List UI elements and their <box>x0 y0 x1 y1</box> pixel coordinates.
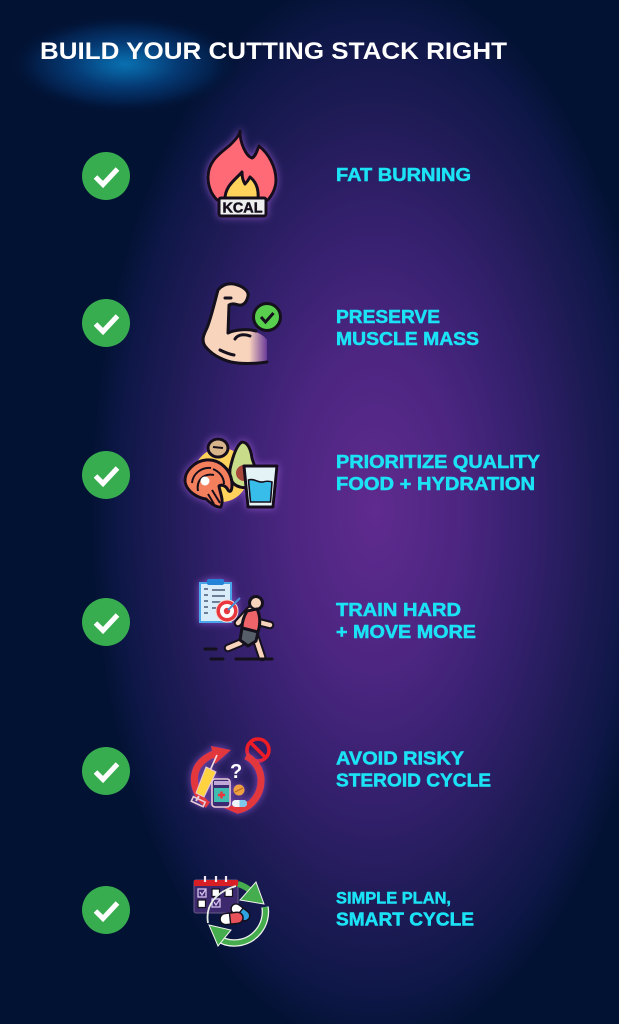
row: fat burning <box>82 131 471 216</box>
icon: prohibition sign <box>247 739 269 761</box>
label: avoid risky steroid cycle <box>336 748 491 790</box>
check icon <box>82 886 130 934</box>
label: simple plan smart cycle: SMART CYCLE <box>336 910 474 930</box>
check icon <box>82 299 130 347</box>
label: simple plan smart cycle: SIMPLE PLAN, <box>336 888 451 908</box>
label: preserve muscle mass: PRESERVE <box>336 307 440 327</box>
label: train hard and move more: + MOVE MORE <box>336 622 476 642</box>
row: avoid risky steroid cycle <box>82 739 491 814</box>
check icon <box>82 152 130 200</box>
icon: flame with kcal label <box>208 131 276 216</box>
icon: flame with kcal label: KCAL <box>222 200 263 216</box>
row: prioritize quality food and hydration <box>82 439 540 507</box>
icon: green cycle arrows <box>208 882 265 946</box>
label: preserve muscle mass <box>336 307 479 349</box>
check icon <box>82 451 130 499</box>
label: fat burning: FAT BURNING <box>336 165 471 185</box>
label: preserve muscle mass: MUSCLE MASS <box>336 329 479 349</box>
icon: calendar <box>194 876 238 913</box>
check icon <box>82 747 130 795</box>
icon: clipboard, target and runner <box>200 579 272 659</box>
row: preserve muscle mass <box>82 284 479 364</box>
label: prioritize quality food and hydration <box>336 452 540 494</box>
label: prioritize quality food and hydration: FOOD + HYDRATION <box>336 474 535 494</box>
row: train hard and move more <box>82 579 476 659</box>
label: train hard and move more <box>336 600 476 642</box>
row: simple plan smart cycle <box>82 876 474 946</box>
label: avoid risky steroid cycle: STEROID CYCLE <box>336 770 491 790</box>
check icon <box>82 598 130 646</box>
label: avoid risky steroid cycle: AVOID RISKY <box>336 748 464 768</box>
icon: flexed arm with check <box>203 284 280 364</box>
icon: salmon, avocado, nut and water glass <box>185 439 277 507</box>
label: prioritize quality food and hydration: PRIORITIZE QUALITY <box>336 452 540 472</box>
icon: calendar, recycling arrows and pills <box>194 876 265 946</box>
label: train hard and move more: TRAIN HARD <box>336 600 461 620</box>
icon: capsules <box>220 902 252 925</box>
label: simple plan smart cycle <box>336 888 474 930</box>
icon: cycle arrows with syringe and pills: ? <box>230 761 242 783</box>
icon: prohibited steroid cycle <box>191 739 269 814</box>
title: BUILD YOUR CUTTING STACK RIGHT <box>40 38 507 65</box>
